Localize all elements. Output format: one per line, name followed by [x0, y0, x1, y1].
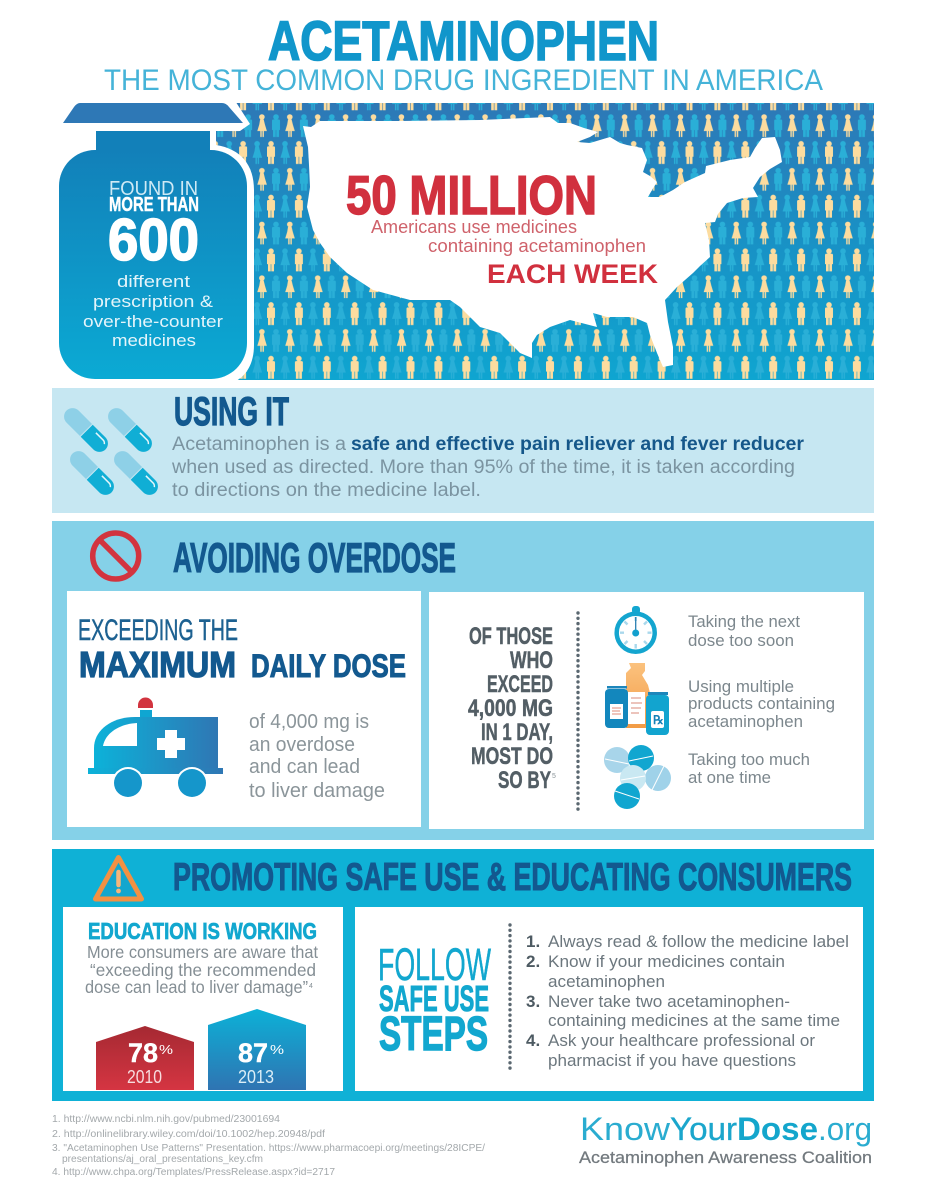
list: safe use steps	[526, 932, 849, 1070]
text: taking next dose: Taking the next	[688, 612, 800, 631]
heading: exceeding the maximum daily dose: DAILY DOSE	[251, 648, 406, 684]
icon: medicine bottles	[605, 663, 669, 735]
panel: avoiding overdose	[52, 521, 874, 840]
panel: people pattern background	[215, 103, 874, 380]
text: education description: More consumers are aware that	[87, 942, 318, 962]
text: of those who exceed: 5	[552, 773, 556, 780]
jar label text: medicines	[112, 331, 196, 350]
text: taking next dose: dose too soon	[688, 631, 794, 650]
text: using it body: to directions on the medicine label.	[172, 480, 481, 501]
jar label text: different	[117, 272, 190, 291]
logo: KnowYourDose.org: Know	[580, 1111, 671, 1147]
logo: KnowYourDose.org: .org	[818, 1111, 872, 1147]
text: multiple products: Using multiple	[688, 677, 794, 696]
statistic: 50 million each week: EACH WEEK	[487, 259, 659, 289]
list: safe use steps: pharmacist if you have questions	[548, 1051, 796, 1070]
icon: stopwatch	[617, 606, 655, 652]
panel: maximum daily dose	[67, 591, 421, 827]
icon: warning triangle	[96, 858, 142, 899]
text: education description	[85, 942, 318, 997]
text: of those who exceed: SO BY	[498, 767, 551, 794]
jar label text: MORE THAN	[109, 194, 199, 216]
title: ACETAMINOPHEN	[268, 9, 659, 72]
text: too much at once: Taking too much	[688, 750, 810, 769]
heading: follow safe use steps	[378, 939, 491, 1061]
text: of those who exceed: WHO	[510, 647, 553, 674]
jar white outline	[50, 96, 254, 386]
text: of those who exceed: 4,000 MG	[468, 695, 553, 722]
list: safe use steps: 2.	[526, 952, 540, 971]
list: safe use steps: 3.	[526, 992, 540, 1011]
icon: tablets	[604, 745, 671, 809]
heading: exceeding the maximum daily dose	[78, 614, 406, 685]
text: of those who exceed: MOST DO	[471, 743, 553, 770]
jar: found in more than 600 medicines	[50, 96, 254, 386]
text: of those who exceed: IN 1 DAY,	[481, 719, 553, 746]
jar label text: prescription &	[93, 292, 214, 311]
jar body	[59, 150, 247, 379]
chart: 2010 bar: 2010	[127, 1067, 162, 1087]
footnotes: 2. http://onlinelibrary.wiley.com/doi/10.1002/hep.20948/pdf	[52, 1129, 325, 1140]
panel: follow safe use steps	[355, 907, 863, 1091]
jar neck	[96, 131, 210, 155]
chart: 2013 bar: 2013	[238, 1067, 274, 1087]
list: safe use steps: Ask your healthcare professional or	[548, 1031, 815, 1050]
chart: 2013 bar: %	[270, 1042, 285, 1057]
text: taking next dose	[688, 612, 800, 650]
text: overdose description: an overdose	[249, 734, 355, 756]
text: of those who exceed: OF THOSE	[469, 623, 553, 650]
panel: education is working	[63, 907, 343, 1091]
footnotes	[52, 1114, 485, 1178]
footnotes: 3. "Acetaminophen Use Patterns" Presentation. https://www.pharmacoepi.org/meetings/28ICPE/	[52, 1143, 485, 1154]
text: too much at once	[688, 750, 810, 787]
jar label text: FOUND IN	[109, 178, 198, 200]
text: using it body: safe and effective pain reliever and fever reducer	[351, 434, 805, 455]
statistic: 50 million each week: 50 MILLION	[346, 164, 597, 226]
text: education description: “exceeding the recommended	[90, 960, 316, 980]
jar label text	[83, 178, 223, 350]
text: overdose description: and can lead	[249, 756, 360, 778]
chart: 2013 bar: 87	[238, 1038, 268, 1068]
heading: avoiding overdose: AVOIDING OVERDOSE	[173, 534, 456, 581]
statistic: 50 million each week	[346, 164, 659, 289]
logo: KnowYourDose.org: Your	[670, 1111, 737, 1147]
panel: using it	[52, 388, 874, 513]
text: of those who exceed	[468, 623, 556, 794]
heading: exceeding the maximum daily dose: EXCEEDING THE	[78, 614, 238, 647]
jar label text: 600	[108, 207, 199, 273]
statistic: 50 million each week: Americans use medicines	[371, 217, 577, 237]
text: multiple products	[688, 677, 835, 731]
list: safe use steps: acetaminophen	[548, 972, 665, 991]
text: using it body: Acetaminophen is a	[172, 434, 346, 455]
heading: follow safe use steps: STEPS	[379, 1008, 488, 1061]
footnotes: 4. http://www.chpa.org/Templates/PressRelease.aspx?id=2717	[52, 1167, 335, 1178]
chart: 2010 bar: %	[159, 1042, 174, 1057]
list: safe use steps: Never take two acetaminophen-	[548, 992, 790, 1011]
heading: follow safe use steps: FOLLOW	[378, 939, 491, 990]
text: overdose description: to liver damage	[249, 780, 385, 802]
heading: using it: USING IT	[174, 390, 289, 434]
panel: promoting safe use	[52, 849, 874, 1101]
text: education description: 4	[309, 983, 313, 990]
list: safe use steps: 1.	[526, 932, 540, 951]
logo: KnowYourDose.org	[579, 1111, 872, 1167]
subtitle: THE MOST COMMON DRUG INGREDIENT IN AMERICA	[104, 64, 823, 97]
chart: 2010 bar: 78	[128, 1038, 158, 1068]
icon: no symbol	[93, 533, 139, 579]
heading: follow safe use steps: SAFE USE	[379, 978, 489, 1019]
chart: 2010 bar	[96, 1026, 194, 1090]
jar label text: over-the-counter	[83, 312, 223, 331]
footnotes: presentations/aj_oral_presentations_key.cfm	[62, 1154, 263, 1165]
panel: how people exceed the dose	[429, 592, 864, 829]
logo: KnowYourDose.org: Dose	[737, 1111, 818, 1147]
text: multiple products: acetaminophen	[688, 712, 803, 731]
text: of those who exceed: EXCEED	[487, 671, 553, 698]
list: safe use steps: Always read & follow the medicine label	[548, 932, 849, 951]
icon: capsules	[61, 405, 161, 498]
text: using it body: when used as directed. More than 95% of the time, it is taken according	[171, 457, 795, 478]
list: safe use steps: Know if your medicines contain	[548, 952, 785, 971]
statistic: 50 million each week: containing acetaminophen	[428, 236, 646, 256]
chart: 2013 bar	[208, 1009, 306, 1090]
text: overdose description	[249, 711, 385, 802]
jar lid	[63, 103, 243, 123]
text: multiple products: products containing	[688, 694, 835, 713]
logo: KnowYourDose.org: Acetaminophen Awareness Coalition	[579, 1148, 872, 1167]
heading: education is working: EDUCATION IS WORKING	[88, 918, 317, 944]
map: United States silhouette	[303, 117, 782, 367]
text: education description: dose can lead to liver damage”	[85, 977, 308, 997]
list: safe use steps: 4.	[526, 1031, 540, 1050]
footnotes: 1. http://www.ncbi.nlm.nih.gov/pubmed/23001694	[52, 1114, 280, 1125]
text: overdose description: of 4,000 mg is	[249, 711, 369, 733]
text: too much at once: at one time	[688, 768, 771, 787]
icon: ambulance	[88, 698, 223, 799]
list: safe use steps: containing medicines at the same time	[548, 1011, 840, 1030]
text: using it body	[171, 434, 805, 501]
heading: exceeding the maximum daily dose: MAXIMUM	[79, 644, 236, 685]
icon: medicine bottles: ℞	[653, 713, 664, 727]
